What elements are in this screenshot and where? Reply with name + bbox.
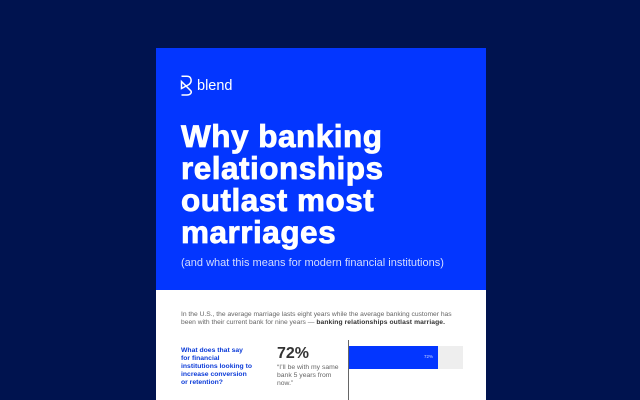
statistic quote <box>277 364 339 387</box>
logo wordmark: blend <box>197 78 232 94</box>
title: Why banking <box>181 118 382 154</box>
question callout <box>181 347 252 386</box>
bar chart <box>348 340 463 400</box>
subtitle: (and what this means for modern financial institutions) <box>181 257 444 269</box>
intro text: been with their current bank for nine years — banking relationships outlast marriage. <box>181 319 445 326</box>
icon: blend logo <box>180 76 192 96</box>
title: marriages <box>181 214 336 250</box>
statistic quote: “I’ll be with my same <box>277 364 339 371</box>
bar track <box>349 346 463 369</box>
title <box>180 118 384 250</box>
panel: infographic page <box>156 48 486 400</box>
intro text: In the U.S., the average marriage lasts eight years while the average banking customer has <box>181 311 452 318</box>
question callout: institutions looking to <box>181 363 252 370</box>
bar label: 72% <box>424 354 433 359</box>
panel: blue header <box>156 48 486 290</box>
title: outlast most <box>181 182 374 218</box>
intro text <box>181 311 452 326</box>
statistic: 72%: 72% <box>277 345 309 362</box>
question callout: increase conversion <box>181 371 247 378</box>
bar chart axis <box>348 340 349 400</box>
question callout: for financial <box>181 355 220 362</box>
bar fill <box>349 346 438 369</box>
title: relationships <box>181 150 384 186</box>
question callout: or retention? <box>181 379 223 386</box>
question callout: What does that say <box>181 347 243 354</box>
statistic quote: now.” <box>277 380 293 387</box>
statistic quote: bank 5 years from <box>277 372 331 379</box>
